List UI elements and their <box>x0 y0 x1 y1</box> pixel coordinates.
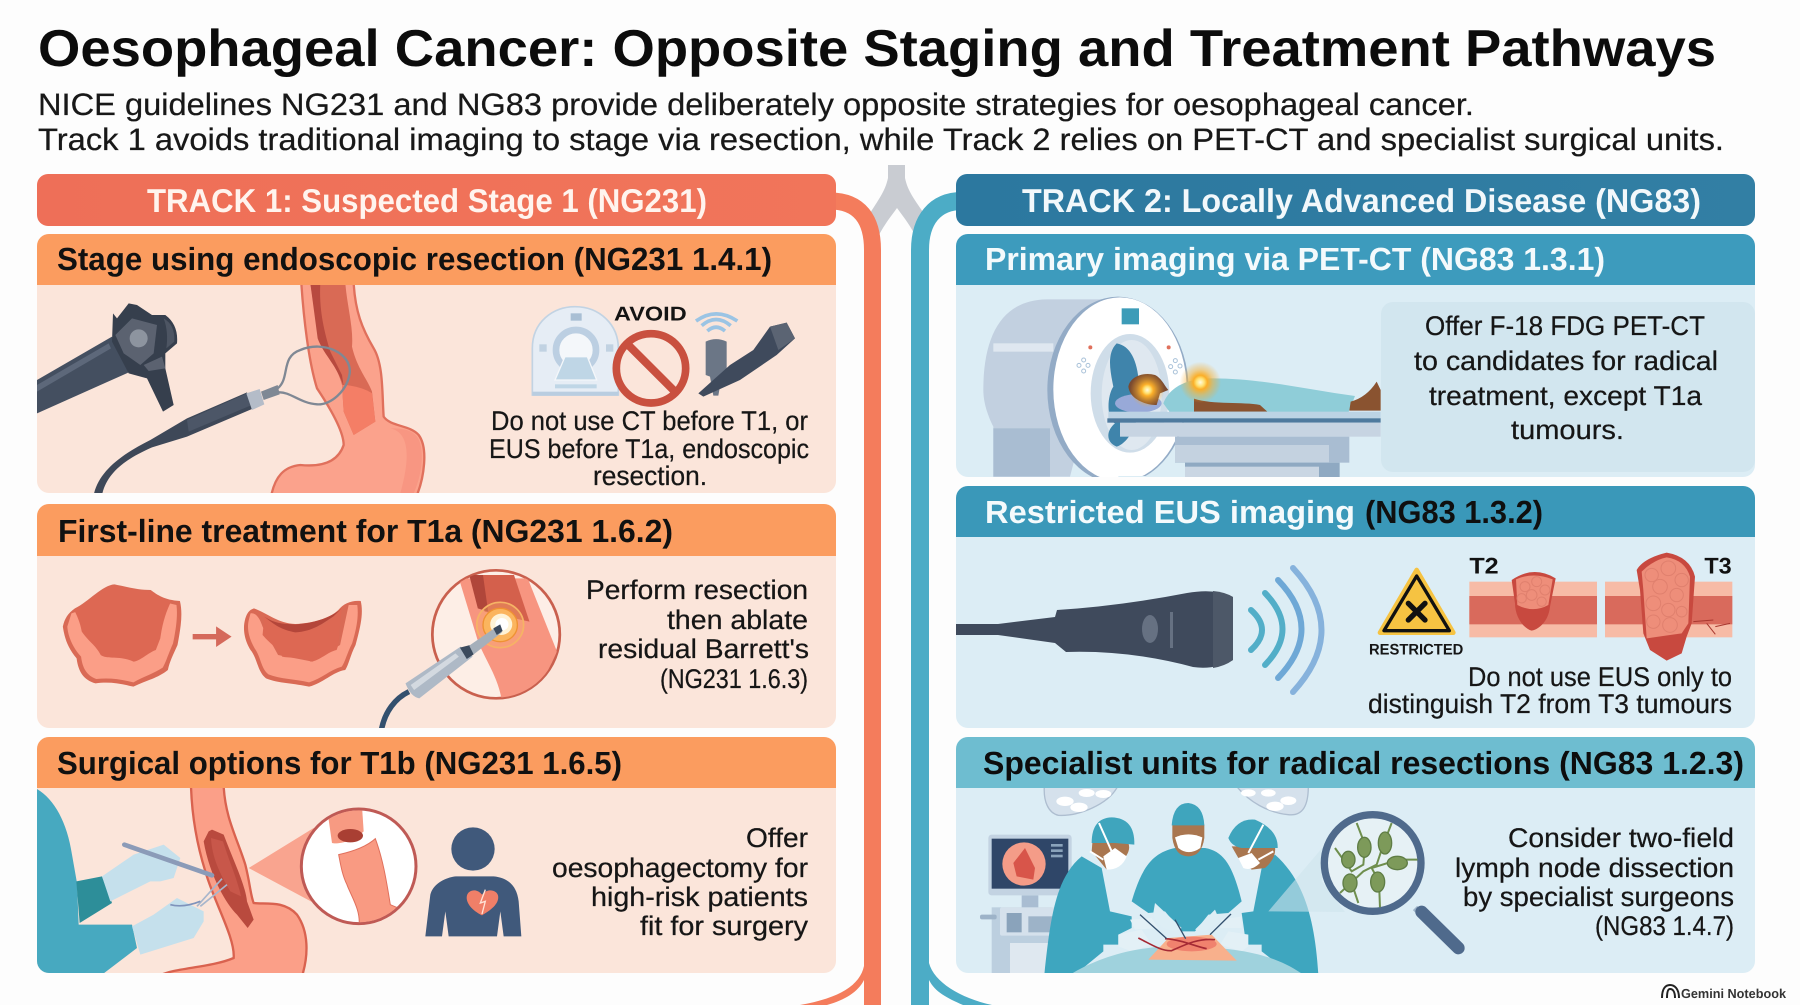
panel: restricted EUS imaging <box>956 486 1755 728</box>
text: perform resection <box>586 575 809 694</box>
subtitle: NICE guidelines NG231 and NG83 provide deliberately opposite strategies for oesophageal cancer. <box>38 87 1474 122</box>
icon: ablation probe <box>381 624 503 730</box>
text: perform resection: Perform resection <box>586 575 808 605</box>
icon: monitor and machine <box>980 835 1072 975</box>
label: restricted: RESTRICTED <box>1369 640 1463 658</box>
label: T3: T3 <box>1704 553 1732 578</box>
text: perform resection: (NG231 1.6.3) <box>660 664 808 694</box>
heading: surgical options <box>37 737 836 788</box>
icon: patient with heart risk <box>425 827 521 936</box>
heading: stage using endoscopic resection: Stage using endoscopic resection (NG231 1.4.1) <box>57 241 772 277</box>
icon: magnifier lymph nodes <box>1268 815 1458 948</box>
icon: theatre lamps <box>1044 786 1308 815</box>
icon: scanner table <box>1107 412 1381 478</box>
heading: primary imaging <box>956 234 1755 285</box>
icon: centre surgeon <box>1132 803 1242 931</box>
text: offer oesophagectomy <box>552 823 809 941</box>
heading: first-line treatment: First-line treatment for T1a (NG231 1.6.2) <box>58 513 673 549</box>
illustration: surgical team <box>980 786 1458 975</box>
text panel: offer PET-CT: to candidates for radical <box>1414 346 1718 376</box>
subtitle <box>38 87 1724 157</box>
text: consider two-field: (NG83 1.4.7) <box>1595 911 1734 941</box>
text: do not use CT: Do not use CT before T1, or <box>491 406 808 436</box>
icon: CT scanner <box>532 307 618 396</box>
icon: tissue after resection <box>244 601 362 687</box>
text: do not use EUS: Do not use EUS only to <box>1468 662 1732 692</box>
icon: avoid CT and EUS <box>532 303 795 403</box>
arrow: resection step <box>193 626 232 647</box>
text: offer oesophagectomy: high-risk patients <box>591 882 808 912</box>
icon: sound waves <box>1251 568 1322 692</box>
icon: scanner gantry <box>983 297 1189 489</box>
heading: restricted EUS imaging: (NG83 1.3.2) <box>1365 494 1543 530</box>
icon: surgeon arms <box>35 788 227 975</box>
text: do not use CT <box>489 406 809 491</box>
icon: endoscope handle <box>37 303 177 413</box>
text panel: offer PET-CT: treatment, except T1a <box>1429 381 1703 411</box>
panel: primary imaging via PET-CT <box>956 234 1755 489</box>
heading: stage using endoscopic resection <box>37 234 836 285</box>
icon: oesophagus and stomach <box>271 283 424 495</box>
text: consider two-field <box>1455 823 1734 941</box>
icon: left surgeon <box>1044 817 1134 973</box>
panel: track 1 header <box>37 174 836 226</box>
text panel: offer PET-CT <box>1381 302 1755 472</box>
text panel: offer PET-CT: Offer F-18 FDG PET-CT <box>1425 311 1705 341</box>
icon: restricted warning <box>1380 570 1453 633</box>
heading: first-line treatment <box>37 504 836 556</box>
illustration: PET-CT scanner with patient <box>983 297 1381 489</box>
panel: first-line treatment for T1a <box>37 504 836 730</box>
heading: restricted EUS imaging <box>956 486 1755 537</box>
icon: oesophagus with tumour <box>159 786 307 976</box>
panel: track 2 header <box>956 174 1755 226</box>
illustration: oesophagectomy <box>35 786 521 976</box>
panel: surgical options for T1b <box>35 737 836 976</box>
text: perform resection: then ablate <box>667 605 808 635</box>
text panel: offer PET-CT: tumours. <box>1511 415 1624 445</box>
text: do not use EUS: distinguish T2 from T3 tumours <box>1368 689 1732 719</box>
illustration: restricted T2 T3 tumours <box>1369 553 1732 661</box>
icon: tracer glow chest <box>1180 362 1221 403</box>
icon: patient drape and incision <box>1070 914 1303 975</box>
label: avoid: AVOID <box>614 303 687 325</box>
heading: specialist units <box>956 737 1755 788</box>
illustration: endoscope and oesophagus <box>37 283 424 495</box>
text: perform resection: residual Barrett's <box>598 634 809 664</box>
panel: track 1 header: TRACK 1: Suspected Stage 1 (NG231) <box>147 182 707 219</box>
arrow: track 2 connector <box>920 201 992 1005</box>
subtitle: Track 1 avoids traditional imaging to stage via resection, while Track 2 relies on PET-CT and specialist surgical units. <box>38 122 1724 157</box>
text: do not use CT: resection. <box>593 461 707 491</box>
text: consider two-field: by specialist surgeons <box>1463 882 1734 912</box>
label: T2: T2 <box>1469 553 1499 578</box>
icon: prohibition sign <box>616 334 686 403</box>
icon: magnified resection circle <box>301 806 416 928</box>
text: offer oesophagectomy: fit for surgery <box>640 911 809 941</box>
text: do not use EUS <box>1368 662 1732 719</box>
illustration: resection and ablation <box>63 570 560 730</box>
text: consider two-field: Consider two-field <box>1508 823 1734 853</box>
panel: track 2 header: TRACK 2: Locally Advanced Disease (NG83) <box>1022 182 1701 219</box>
icon: right surgeon <box>1220 820 1318 975</box>
icon: T3 tumour <box>1605 553 1732 661</box>
icon: patient <box>1115 374 1381 413</box>
text: do not use CT: EUS before T1a, endoscopic <box>489 434 809 464</box>
heading: primary imaging: Primary imaging via PET-CT (NG83 1.3.1) <box>985 241 1605 277</box>
icon: ultrasound probe <box>956 591 1233 668</box>
icon: tracer glow head <box>1130 373 1165 407</box>
icon: ablation magnified circle <box>432 570 560 702</box>
text: consider two-field: lymph node dissection <box>1455 853 1734 883</box>
arrow: track 1 connector <box>800 201 872 1005</box>
heading: restricted EUS imaging: Restricted EUS imaging <box>985 494 1355 530</box>
panel: stage using endoscopic resection <box>37 234 836 495</box>
icon: EUS probes <box>696 314 795 397</box>
title: Oesophageal Cancer: Opposite Staging and Treatment Pathways <box>38 20 1716 78</box>
text: offer oesophagectomy: Offer <box>746 823 808 853</box>
icon: callout wedge <box>249 828 317 905</box>
text: offer oesophagectomy: oesophagectomy for <box>552 853 808 883</box>
arrow: grey fork between tracks <box>869 165 925 235</box>
icon: T2 tumour <box>1469 572 1597 637</box>
heading: surgical options: Surgical options for T1b (NG231 1.6.5) <box>57 745 622 781</box>
icon: snare device <box>94 347 350 495</box>
panel: specialist units <box>956 737 1755 975</box>
heading: specialist units: Specialist units for radical resections (NG83 1.2.3) <box>983 745 1744 781</box>
icon: tissue before resection <box>63 584 181 687</box>
footer: Gemini Notebook badge: Gemini Notebook <box>1681 986 1787 1001</box>
